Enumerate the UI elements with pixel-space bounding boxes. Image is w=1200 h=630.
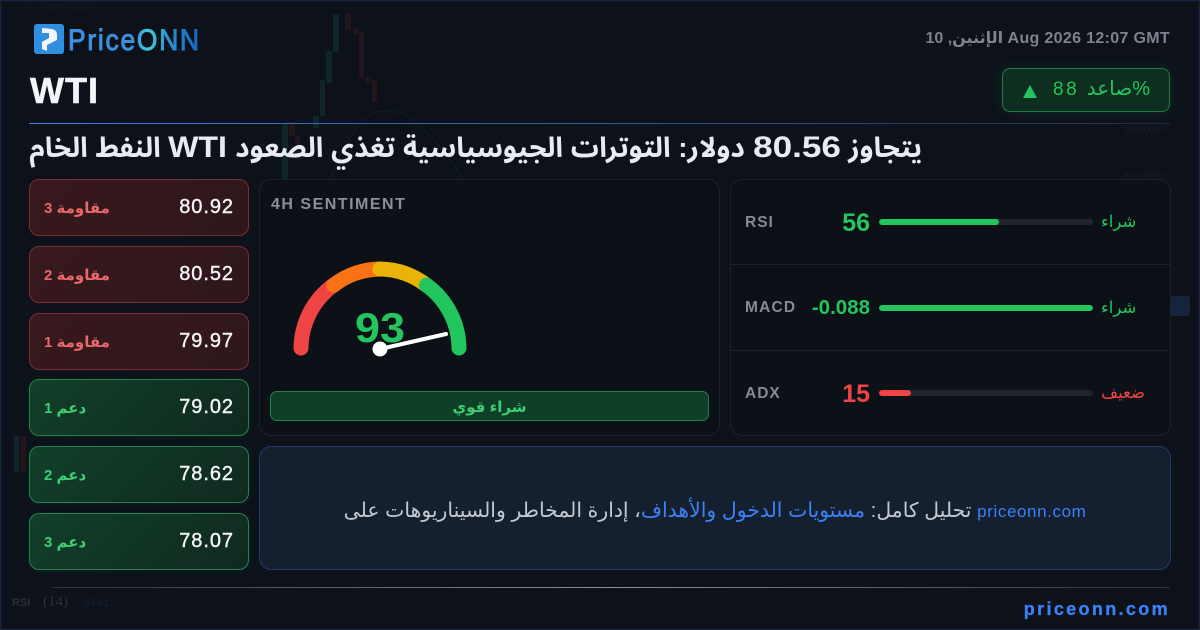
indicator row: RSI: شراء	[1101, 213, 1136, 231]
support and resistance levels	[29, 179, 249, 570]
faint chart backdrop: (14)	[43, 594, 68, 610]
level: support 3: 78.07	[179, 530, 234, 552]
faint chart backdrop: 69.61	[84, 598, 109, 609]
call to action text: priceonn.com تحليل كامل: مستويات الدخول والأهداف، إدارة المخاطر والسيناريوهات على	[344, 500, 1086, 522]
level: support 2: دعم 2	[44, 467, 86, 484]
faint chart backdrop: 90.00000	[1124, 79, 1166, 90]
main headline: يتجاوز دولار: التوترات الجيوسياسية تغذي الصعود النفط الخام	[30, 132, 922, 163]
level: support 3: دعم 3	[44, 534, 86, 551]
signal pill: strong buy: شراء قوي	[452, 399, 527, 416]
bullish value: 88	[1053, 79, 1079, 100]
sentiment gauge: 93	[355, 304, 405, 351]
level: resistance 1: 79.97	[179, 330, 234, 352]
faint chart backdrop: 88.00000	[1124, 125, 1166, 136]
main headline: 80.56	[753, 131, 840, 164]
footer url: priceonn.com	[1024, 599, 1170, 619]
level: resistance 2: مقاومة 2	[44, 267, 110, 284]
indicator row: ADX: ضعيف	[1101, 384, 1145, 402]
indicator row: MACD	[745, 296, 1136, 319]
date and time: 10 ,الإثنين Aug 2026 12:07 GMT	[925, 30, 1170, 47]
bullish arrow	[1023, 85, 1037, 98]
level: resistance 1	[29, 313, 249, 370]
level: support 2: 78.62	[179, 463, 234, 485]
indicator row: ADX: 15	[842, 380, 870, 408]
indicator row: MACD: شراء	[1101, 299, 1136, 317]
bullish label: %صاعد	[1087, 78, 1150, 100]
level: support 1	[29, 379, 249, 436]
indicator row: ADX: ADX	[745, 385, 781, 402]
logo: PriceONN: PriceONN	[68, 22, 199, 56]
indicator row: MACD: MACD	[745, 299, 796, 316]
faint chart backdrop: RSI	[12, 597, 30, 609]
header divider	[29, 123, 1170, 124]
level: resistance 3: مقاومة 3	[44, 200, 110, 217]
level: resistance 2: 80.52	[179, 263, 234, 285]
level: support 2	[29, 446, 249, 503]
call to action panel	[259, 446, 1171, 570]
sentiment gauge	[294, 262, 466, 356]
level: support 1: دعم 1	[44, 400, 86, 417]
indicator row: MACD: -0.088	[812, 296, 870, 319]
footer divider	[52, 587, 1170, 588]
level: resistance 3: 80.92	[179, 196, 234, 218]
faint chart backdrop: 10 August 2026	[25, 2, 95, 13]
badge: bullish 88%	[1002, 68, 1170, 112]
indicator row: RSI	[745, 209, 1136, 237]
panel: indicators	[730, 179, 1171, 436]
indicator row: RSI: 56	[842, 209, 870, 237]
signal pill: strong buy	[270, 391, 709, 421]
level: support 3	[29, 513, 249, 570]
level: resistance 3	[29, 179, 249, 236]
panel heading: 4H SENTIMENT	[271, 196, 406, 213]
panel: 4H sentiment	[259, 179, 720, 436]
level: support 1: 79.02	[179, 396, 234, 418]
symbol heading: WTI	[30, 70, 99, 111]
faint chart backdrop: 86.00000	[1124, 171, 1166, 182]
indicator row: ADX	[745, 380, 1145, 408]
level: resistance 2	[29, 246, 249, 303]
indicator row: RSI: RSI	[745, 214, 774, 231]
level: resistance 1: مقاومة 1	[44, 334, 110, 351]
main headline: WTI	[169, 131, 227, 164]
